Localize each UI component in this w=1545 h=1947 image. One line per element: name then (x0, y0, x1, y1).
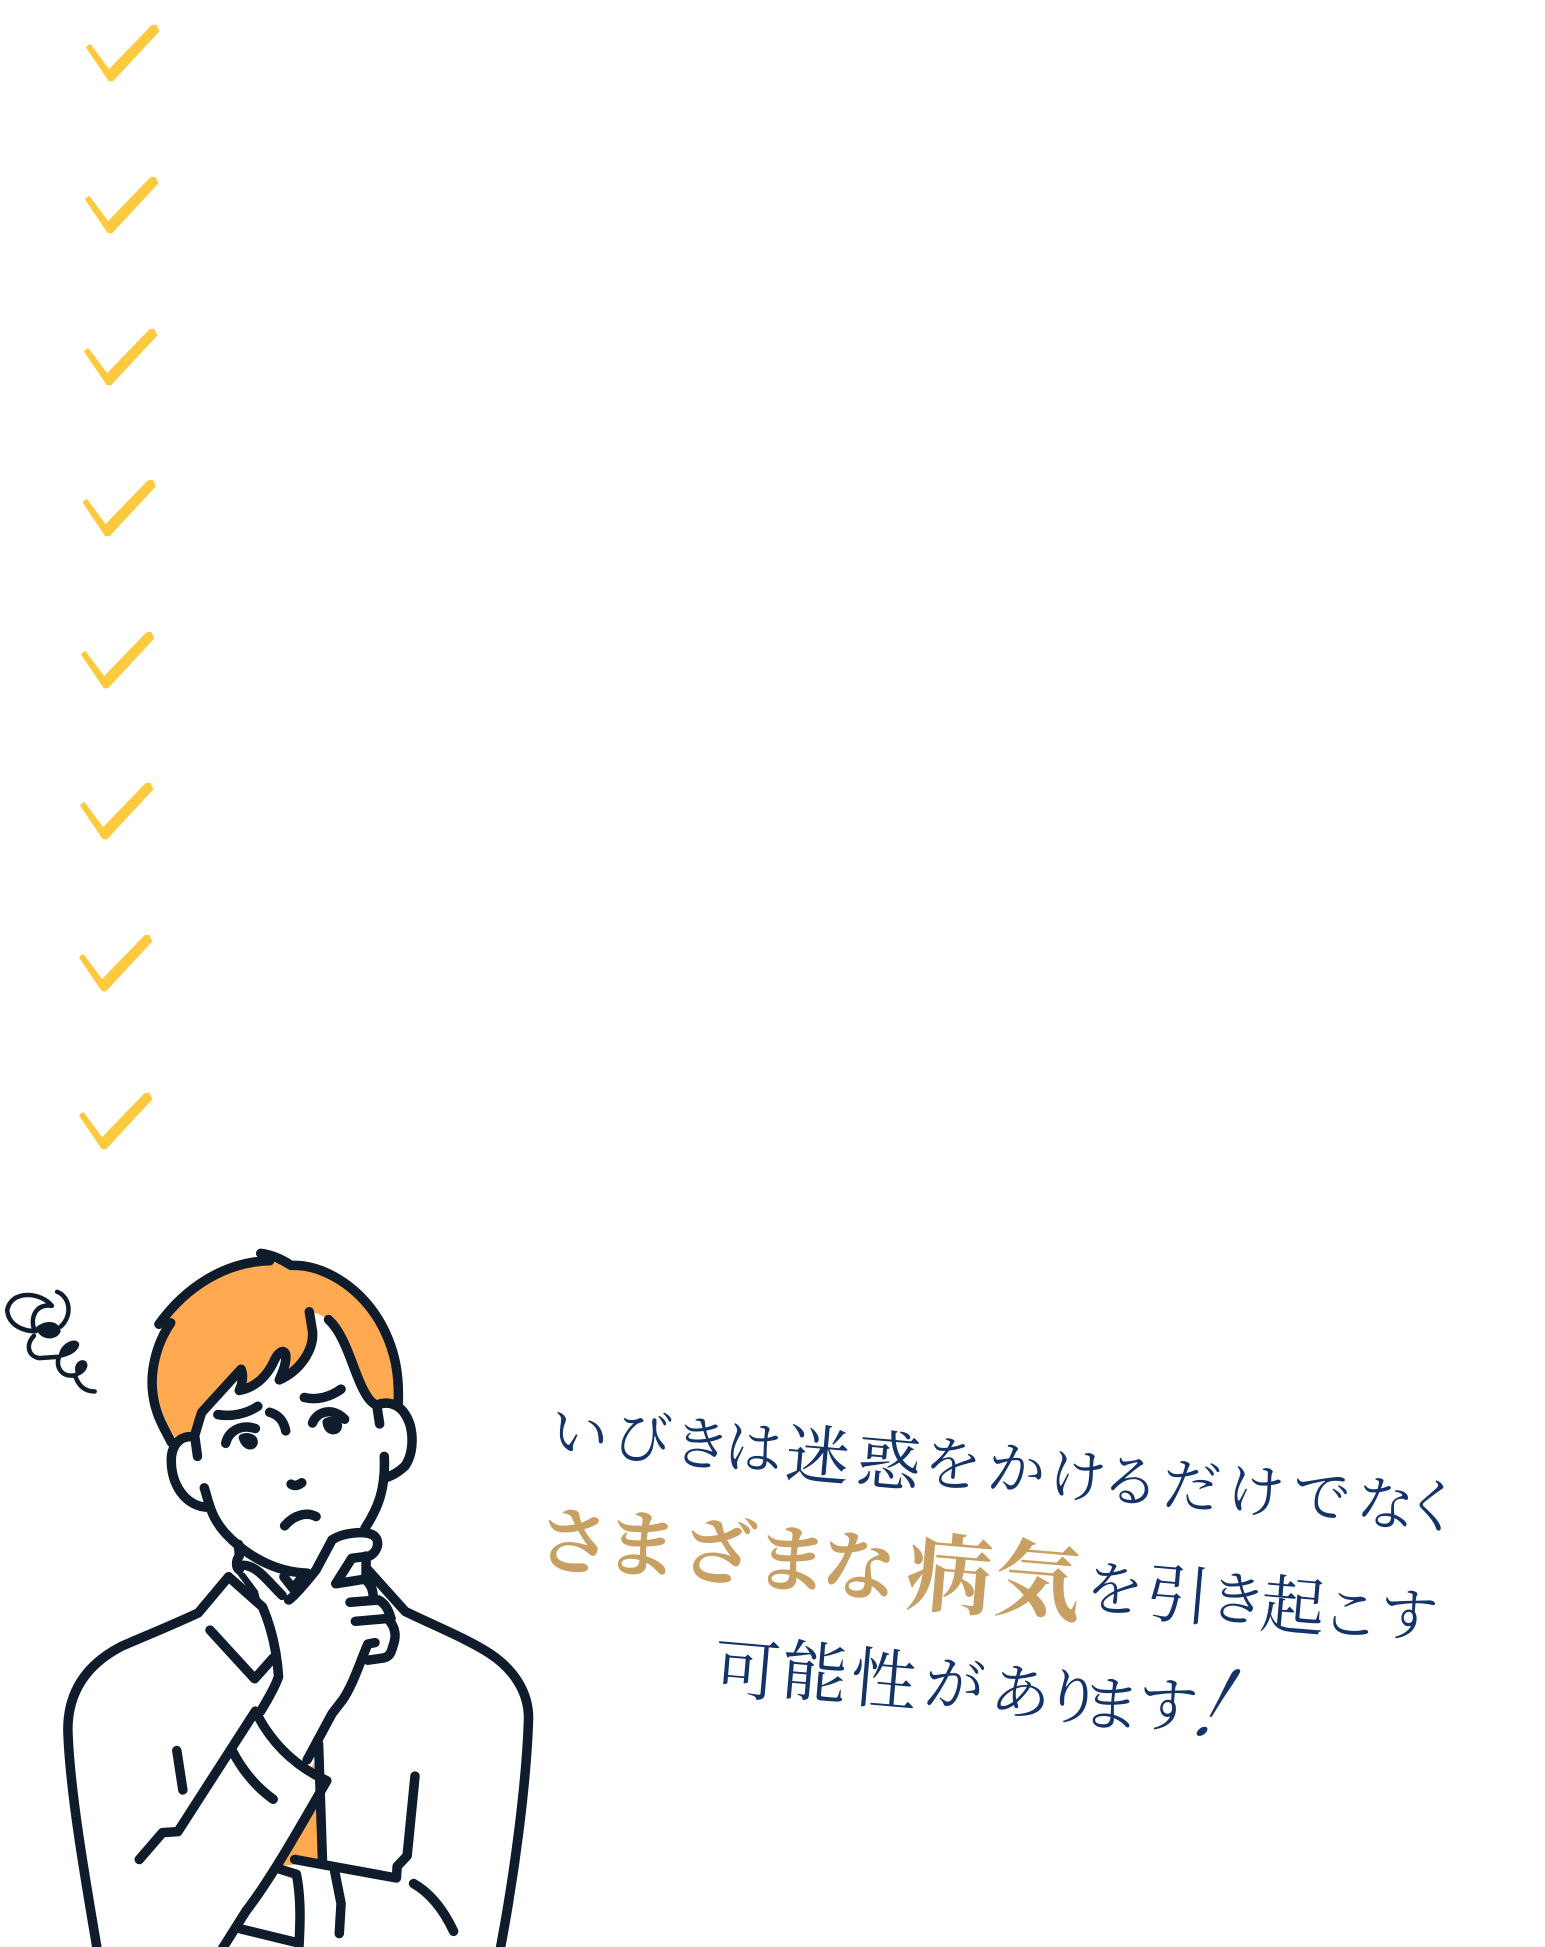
text line 2: こす (1319, 1580, 1440, 1651)
text line 1: 迷惑 (783, 1418, 924, 1500)
illustration: thinking man (7, 1253, 529, 1947)
icon: check mark 1 (88, 26, 158, 80)
icon: check mark 5 (82, 633, 153, 687)
text line 2: さまざまな (534, 1500, 899, 1613)
icon: check mark 8 (80, 1094, 151, 1148)
jacket (68, 1570, 529, 1947)
icon: check mark 7 (80, 936, 151, 990)
hair fill (154, 1262, 398, 1438)
icon: check mark 6 (82, 784, 152, 838)
text line 3: 可能性 (711, 1633, 920, 1721)
text line 1: いびきは (548, 1399, 785, 1484)
icon: check mark 2 (86, 178, 157, 232)
text line 2: き (1206, 1565, 1269, 1635)
text line 2: 起 (1258, 1569, 1328, 1645)
hand on chin (236, 1533, 395, 1760)
text line 2: 引 (1143, 1558, 1213, 1634)
shirt fill (279, 1762, 318, 1866)
head and hair outline (152, 1253, 412, 1573)
icon: check mark 4 (84, 481, 154, 535)
callout text (534, 1399, 1464, 1755)
text line 3: があります (922, 1650, 1200, 1742)
text line 2: を (1083, 1555, 1146, 1625)
text line 1: をかけるだけでなく (921, 1430, 1464, 1542)
icon: confused swirl (7, 1292, 95, 1391)
face (218, 1389, 345, 1526)
text line 2: 病気 (902, 1525, 1085, 1634)
icon: check mark 3 (86, 330, 156, 384)
exclamation mark: ！ (1167, 1660, 1308, 1755)
